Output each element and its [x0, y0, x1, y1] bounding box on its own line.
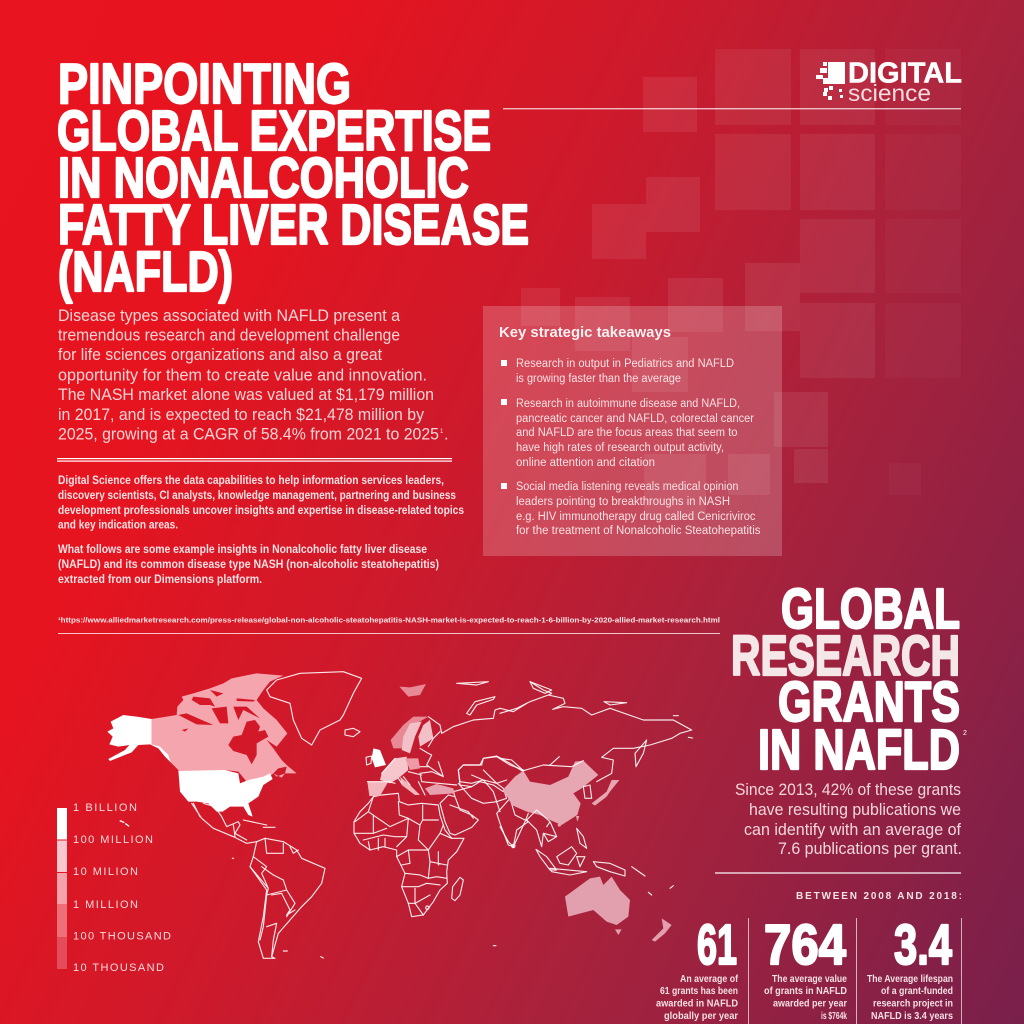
stat: 61 grants: 61 grants has been — [660, 985, 738, 997]
stat: 61 grants: globally per year — [664, 1010, 738, 1022]
body paragraphs: discovery scientists, CI analysts, knowledge management, partnering and business — [58, 490, 456, 502]
title: IN NONALCOHOLIC — [58, 146, 469, 210]
legend: 10 THOUSAND — [73, 962, 164, 974]
takeaway bullets: e.g. HIV immunotherapy drug called Cenicriviroc — [516, 511, 756, 523]
intro paragraph: The NASH market alone was valued at $1,179 million — [58, 386, 434, 404]
legend: 1 MILLION — [73, 899, 138, 911]
stat: 3.4 years: research project in — [873, 998, 953, 1010]
grants summary text — [735, 781, 962, 858]
title: GLOBAL EXPERTISE — [57, 99, 491, 163]
intro paragraph: 2025, growing at a CAGR of 58.4% from 2021 to 2025 — [58, 426, 439, 444]
heading: global research grants — [731, 577, 967, 782]
intro paragraph — [58, 307, 449, 444]
stat: 61 grants: An average of — [680, 973, 738, 985]
stat: 764 value — [764, 913, 847, 1022]
logo: Digital Science: DIGITAL — [848, 58, 962, 90]
legend: 10 MILION — [73, 866, 138, 878]
stat: 61 grants: awarded in NAFLD — [656, 998, 738, 1010]
intro paragraph: . — [444, 426, 449, 444]
body paragraphs: and key indication areas. — [58, 520, 178, 532]
body paragraphs: (NAFLD) and its common disease type NASH (non-alcoholic steatohepatitis) — [58, 559, 439, 571]
takeaway bullets: is growing faster than the average — [516, 373, 681, 385]
stat: 61 grants: 61 — [697, 913, 737, 977]
stat: 764 value: 764 — [764, 913, 846, 977]
grants summary text: 7.6 publications per grant. — [778, 840, 962, 858]
title: PINPOINTING — [58, 52, 351, 116]
takeaway bullets: Research in output in Pediatrics and NAFLD — [516, 358, 734, 370]
takeaway bullets: for the treatment of Nonalcoholic Steatohepatitis — [516, 525, 761, 537]
world map — [107, 672, 693, 958]
body paragraphs — [58, 475, 464, 586]
intro paragraph: 1 — [440, 429, 444, 435]
background pixel squares — [521, 49, 961, 520]
takeaway bullets: leaders pointing to breakthroughs in NASH — [516, 496, 730, 508]
stat: 3.4 years: The Average lifespan — [867, 973, 953, 985]
legend: 100 MILLION — [73, 834, 153, 846]
intro paragraph: opportunity for them to create value and innovation. — [58, 366, 427, 384]
takeaway bullets: online attention and citation — [516, 457, 655, 469]
takeaway bullets: pancreatic cancer and NAFLD, colorectal cancer — [516, 413, 754, 425]
intro paragraph: Disease types associated with NAFLD present a — [58, 307, 401, 325]
heading: global research grants: IN NAFLD — [758, 718, 960, 782]
body paragraphs: Digital Science offers the data capabilities to help information services leaders, — [58, 475, 444, 487]
stat: 61 grants — [656, 913, 738, 1022]
legend — [57, 802, 171, 974]
logo: Digital Science: science — [848, 80, 931, 106]
takeaway bullets: have high rates of research output activity, — [516, 442, 724, 454]
stat: 764 value: awarded per year — [773, 998, 847, 1010]
intro paragraph: for life sciences organizations and also a great — [58, 346, 382, 364]
stat: 3.4 years: of a grant-funded — [881, 985, 953, 997]
takeaway bullets: and NAFLD are the focus areas that seem to — [516, 427, 738, 439]
logo: Digital Science — [816, 58, 962, 106]
stat: 3.4 years: NAFLD is 3.4 years — [871, 1010, 953, 1022]
body paragraphs: What follows are some example insights in Nonalcoholic fatty liver disease — [58, 544, 427, 556]
legend: 100 THOUSAND — [73, 930, 171, 942]
stat dividers — [748, 918, 962, 1024]
footnote: ¹https://www.alliedmarketresearch.com/press-release/global-non-alcoholic-steatohepatitis-NASH-market-is-expected-to-reach-1-6-billion-by-2020-allied-market-research.html — [58, 616, 720, 624]
grants summary text: Since 2013, 42% of these grants — [735, 781, 961, 799]
stat: 764 value: The average value — [772, 973, 847, 985]
grants summary text: have resulting publications we — [749, 801, 961, 819]
period label: BETWEEN 2008 AND 2018: — [796, 891, 962, 902]
title: (NAFLD) — [58, 240, 233, 304]
body paragraphs: extracted from our Dimensions platform. — [58, 574, 262, 586]
heading: global research grants: GRANTS — [778, 670, 960, 734]
stat: 764 value: is $764k — [821, 1010, 847, 1022]
stat: 3.4 years — [867, 913, 953, 1022]
intro paragraph: tremendous research and development challenge — [58, 326, 400, 344]
stat: 764 value: of grants in NAFLD — [764, 985, 847, 997]
panel heading: Key strategic takeaways — [499, 324, 671, 341]
panel: key strategic takeaways — [483, 306, 782, 556]
title: FATTY LIVER DISEASE — [58, 193, 529, 257]
takeaway bullets — [501, 358, 761, 537]
heading: global research grants: 2 — [963, 730, 967, 737]
grants summary text: can identify with an average of — [744, 821, 961, 839]
stat: 3.4 years: 3.4 — [894, 913, 952, 977]
heading: global research grants: GLOBAL — [781, 577, 960, 641]
takeaway bullets: Research in autoimmune disease and NAFLD, — [516, 398, 740, 410]
legend: 1 BILLION — [73, 802, 137, 814]
takeaway bullets: Social media listening reveals medical opinion — [516, 481, 738, 493]
title — [57, 52, 529, 304]
body paragraphs: development professionals uncover insights and expertise in disease-related topics — [58, 505, 464, 517]
intro paragraph: in 2017, and is expected to reach $21,478 million by — [58, 406, 425, 424]
